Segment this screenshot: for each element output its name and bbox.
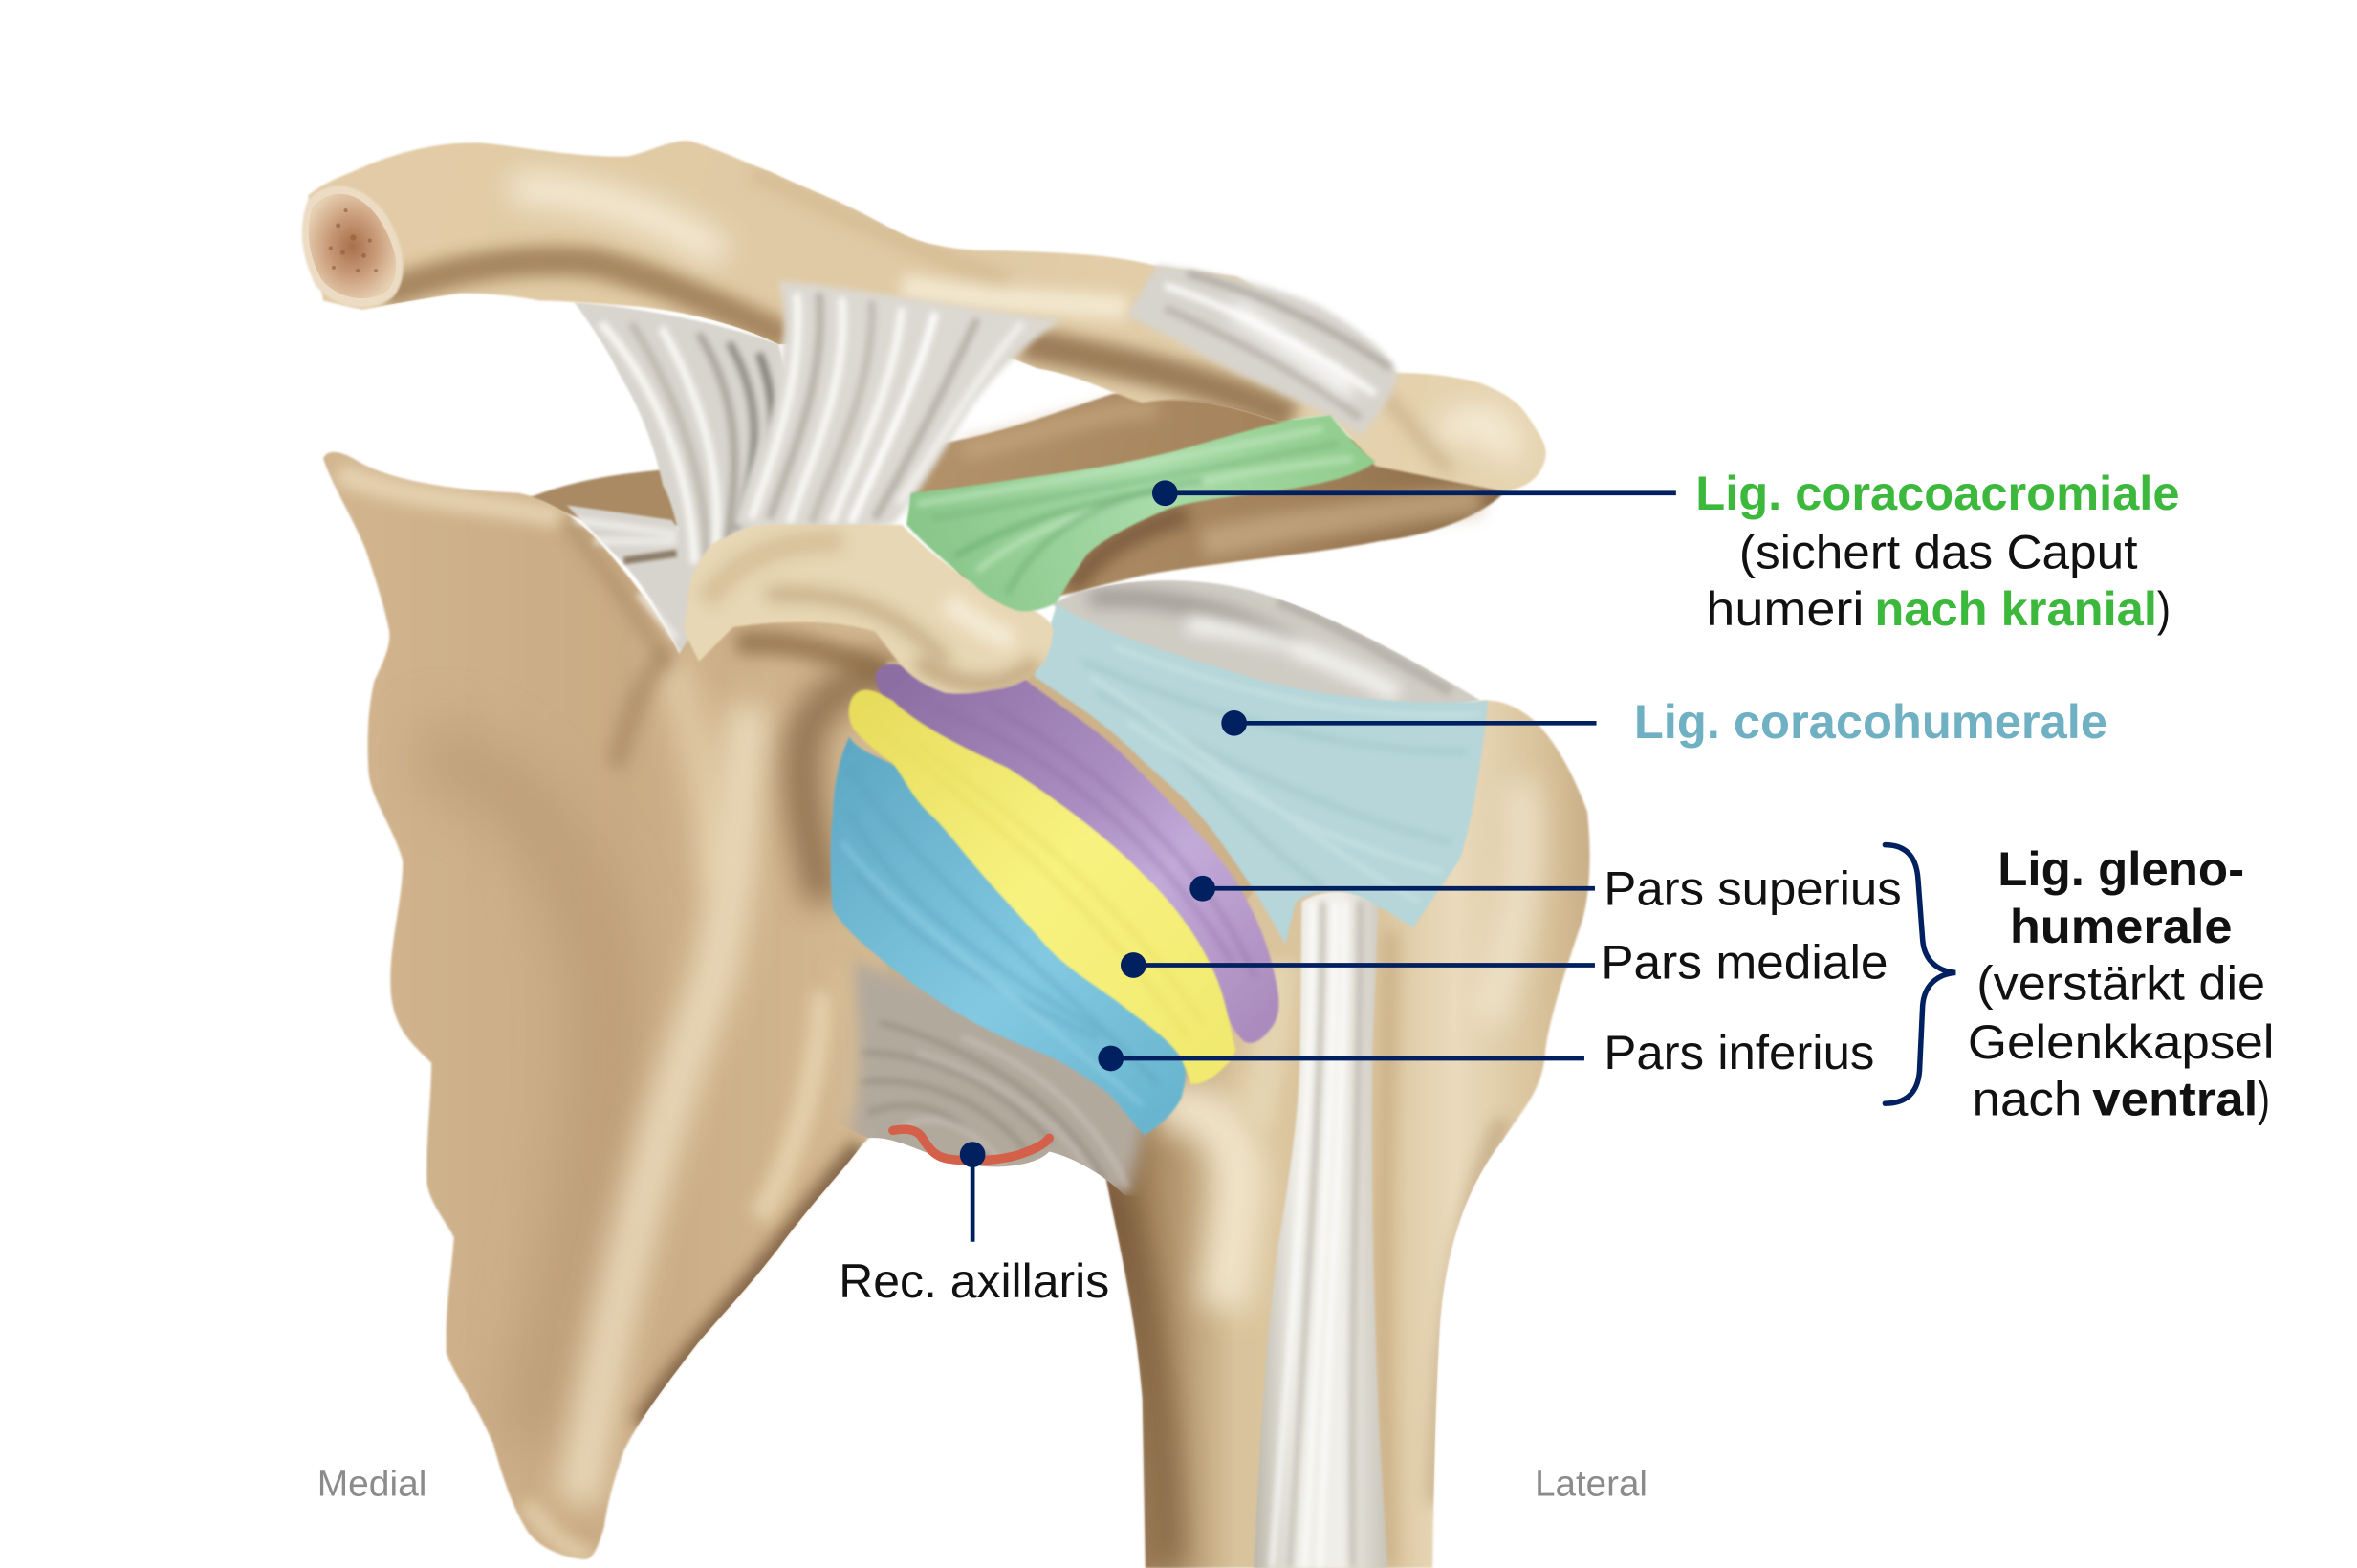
ligament: acromioclavicular grey <box>1127 265 1398 436</box>
callout: Pars mediale: Pars mediale <box>1601 935 1888 990</box>
ligament: glenohumerale pars superius purple <box>875 664 1278 1043</box>
callout: Rec. axillaris: Rec. axillaris <box>839 1253 1109 1308</box>
bone: backing behind glenohumeral ligaments <box>887 639 1361 1145</box>
bone: coracoid process <box>684 525 1053 693</box>
icon: cut end of clavicle <box>302 186 404 308</box>
callout: Pars superius <box>1189 861 1902 916</box>
bone: humerus <box>1104 700 1590 1568</box>
ligament: trapezoid coracoclavicular <box>733 281 1061 534</box>
muscle tendon: supraspinatus grey <box>1053 579 1480 704</box>
text block: Lig. glenohumerale: humerale <box>2010 899 2233 953</box>
bone: clavicle and acromion <box>308 141 1546 491</box>
ligament: coracoacromiale green <box>906 415 1375 611</box>
recessus axillaris red outline <box>893 1129 1049 1161</box>
ligament: glenohumerale pars mediale yellow <box>849 689 1235 1084</box>
callout: Pars superius: Pars superius <box>1604 861 1902 916</box>
capsule: grey recess tissue <box>836 962 1150 1195</box>
callout: curly brace <box>1885 845 1955 1103</box>
callout: Rec. axillaris <box>839 1142 1109 1308</box>
text block: Lig. glenohumerale <box>1968 841 2275 1126</box>
callout: Lig. coracoacromiale: ) <box>2157 581 2171 636</box>
label: Lateral: Lateral <box>1535 1464 1648 1504</box>
text block: Lig. glenohumerale: (verstärkt die <box>1976 956 2265 1011</box>
callout: Lig. coracoacromiale: nach kranial <box>1874 581 2157 636</box>
callout: Pars inferius <box>1098 1025 1874 1079</box>
text block: Lig. glenohumerale: ventral <box>2092 1072 2258 1126</box>
callout: Pars mediale <box>1121 935 1888 990</box>
text block: Lig. glenohumerale: Gelenkkapsel <box>1968 1014 2275 1069</box>
panel: shoulder anatomy illustration <box>302 141 1590 1568</box>
ligament: coracohumerale light blue <box>1035 604 1488 944</box>
callout: Lig. coracoacromiale: Lig. coracoacromiale <box>1695 466 2179 520</box>
callout: Pars inferius: Pars inferius <box>1604 1025 1874 1079</box>
scapular spine underside behind ligaments <box>529 390 1506 596</box>
text block: Lig. glenohumerale: nach <box>1973 1072 2082 1126</box>
callout: Lig. coracoacromiale <box>1152 466 2179 636</box>
callout: Lig. coracohumerale: Lig. coracohumerale <box>1634 694 2107 749</box>
bone: transverse and conoid ligaments <box>567 302 797 652</box>
label: Medial: Medial <box>317 1464 426 1504</box>
bone: scapula <box>323 452 917 1559</box>
tendon: long head of biceps <box>1254 892 1387 1568</box>
text block: Lig. glenohumerale: ) <box>2258 1072 2270 1126</box>
text block: Lig. glenohumerale: Lig. gleno- <box>1997 841 2244 896</box>
ligament: glenohumerale pars inferius blue <box>831 736 1186 1135</box>
callout: Lig. coracoacromiale: (sichert das Caput <box>1739 524 2137 578</box>
callout: Lig. coracoacromiale: humeri <box>1706 581 1864 636</box>
callout: Lig. coracohumerale <box>1221 694 2107 749</box>
